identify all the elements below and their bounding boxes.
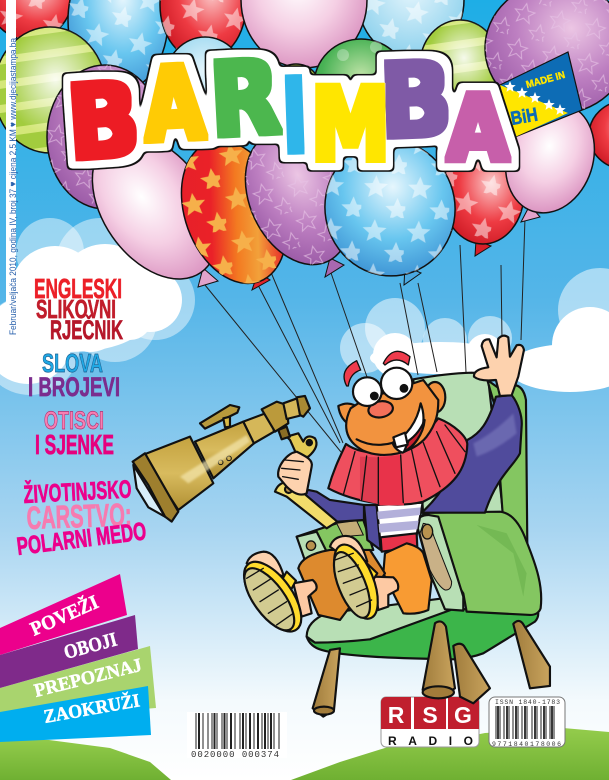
logo: RSG radio: R (388, 702, 405, 728)
text: Zivotinjsko carstvo polarni medo: POLARNI MEDO (15, 517, 148, 561)
flag: made in BiH (500, 52, 582, 137)
figure: holding hand and yellow arm (275, 427, 337, 528)
balloon: lower left pink (67, 112, 243, 302)
banner: prepoznaj: PREPOZNAJ (32, 655, 144, 702)
title: BARIMBA (63, 38, 509, 185)
logo: RSG radio: RADIO (388, 734, 473, 748)
figure: raised hand (474, 336, 524, 396)
flag: made in BiH: BiH (509, 105, 539, 130)
title: BARIMBA: M (311, 66, 390, 185)
balloon: left purple (47, 65, 163, 209)
vertical issue line: Februar/veljača 2010, godina IV, broj 37 ♥ cijena 2,5 KM ♥ www.djecijastampa.ba (8, 37, 19, 335)
text: Zivotinjsko carstvo polarni medo (15, 473, 148, 561)
figure: striped shirt (364, 503, 423, 552)
cloud: right (340, 268, 609, 392)
text: Slova i brojevi (28, 348, 120, 402)
cloud: left (0, 218, 195, 395)
title: BARIMBA: R (207, 38, 283, 161)
telescope (133, 396, 310, 522)
balloon strings (205, 218, 525, 452)
balloon: right red (442, 142, 524, 256)
banner: oboji: OBOJI (62, 629, 120, 664)
balloon: top red (160, 0, 246, 61)
balloon: top light blue (358, 0, 464, 58)
character in chair with telescope (133, 336, 550, 717)
balloon: left green stripes (0, 27, 106, 153)
banner: zaokruzi: ZAOKRUŽI (42, 689, 141, 728)
title: BARIMBA: A (447, 75, 509, 182)
banner: prepoznaj (0, 646, 156, 720)
white vertical strip (6, 0, 16, 345)
title: BARIMBA: B (63, 60, 144, 184)
balloon: top pink (241, 0, 367, 68)
figure: mouth (357, 403, 425, 453)
title: BARIMBA: A (141, 44, 207, 166)
chair: arm details (306, 521, 527, 597)
chair: seat base (297, 512, 541, 659)
text: Otisci i sjenke: I SJENKE (35, 429, 114, 460)
flag: made in BiH: MADE IN (525, 70, 566, 91)
logo: RSG radio (381, 697, 479, 748)
balloon: green dots (314, 39, 408, 131)
banner: zaokruzi (0, 686, 151, 742)
balloon: red with orange stars (163, 126, 305, 298)
balloon: top blue stars (68, 0, 168, 92)
banner: povezi: POVEŽI (26, 589, 102, 641)
text: Slova i brojevi: I BROJEVI (28, 372, 120, 402)
text: Otisci i sjenke (35, 407, 114, 460)
figure: trousers (298, 543, 432, 620)
balloon: right green stripes (420, 20, 500, 110)
figure: eyes (353, 368, 412, 406)
banner: povezi (0, 574, 127, 655)
figure: left sleeve (300, 490, 364, 522)
balloon: top left red (0, 0, 72, 40)
barcode: ISSN (489, 697, 565, 748)
text: Zivotinjsko carstvo polarni medo: CARSTVO: (26, 496, 132, 536)
barcode: left (187, 712, 287, 760)
barcode: ISSN: 9771840178006 (492, 741, 561, 748)
figure: face (346, 380, 438, 455)
balloon: center blue (314, 130, 466, 286)
text: Engleski slikovni rjecnik: RJEČNIK (50, 314, 123, 345)
logo: RSG radio: S (422, 702, 438, 728)
text: Slova i brojevi: SLOVA (42, 348, 103, 378)
title: BARIMBA: I (282, 57, 308, 177)
chair: legs (313, 621, 550, 717)
text: Engleski slikovni rjecnik: SLIKOVNI (36, 294, 116, 324)
barcode: left: 0020000 000374 (191, 750, 279, 760)
text: Engleski slikovni rjecnik: ENGLESKI (34, 273, 122, 304)
text: Zivotinjsko carstvo polarni medo: ŽIVOTINJSKO (23, 473, 132, 509)
balloon: small olive (272, 64, 320, 112)
balloon: right pink (492, 91, 608, 225)
telescope highlight (180, 435, 250, 483)
balloon: far right red (589, 101, 609, 169)
balloon: center purple (225, 114, 371, 282)
figure: right sleeve (422, 395, 522, 513)
figure: right foot (325, 536, 398, 625)
figure: ears (338, 382, 445, 426)
title: BARIMBA: B (378, 41, 454, 162)
barcode: ISSN: ISSN 1840-1783 (495, 699, 560, 706)
banners (0, 574, 156, 742)
balloon: middle light blue (165, 37, 245, 123)
text: Otisci i sjenke: OTISCI (44, 407, 104, 435)
logo: RSG radio: G (454, 702, 472, 728)
text: Engleski slikovni rjecnik (34, 273, 123, 345)
balloon: top right purple (485, 0, 609, 114)
hills (0, 728, 609, 780)
banner: oboji (0, 615, 138, 688)
figure: left foot (233, 552, 317, 641)
figure: red ruff collar (328, 418, 467, 505)
figure: nose (367, 399, 394, 419)
chair: back (413, 373, 527, 543)
sleeve highlight (473, 413, 517, 457)
figure: eyebrows (344, 351, 410, 386)
